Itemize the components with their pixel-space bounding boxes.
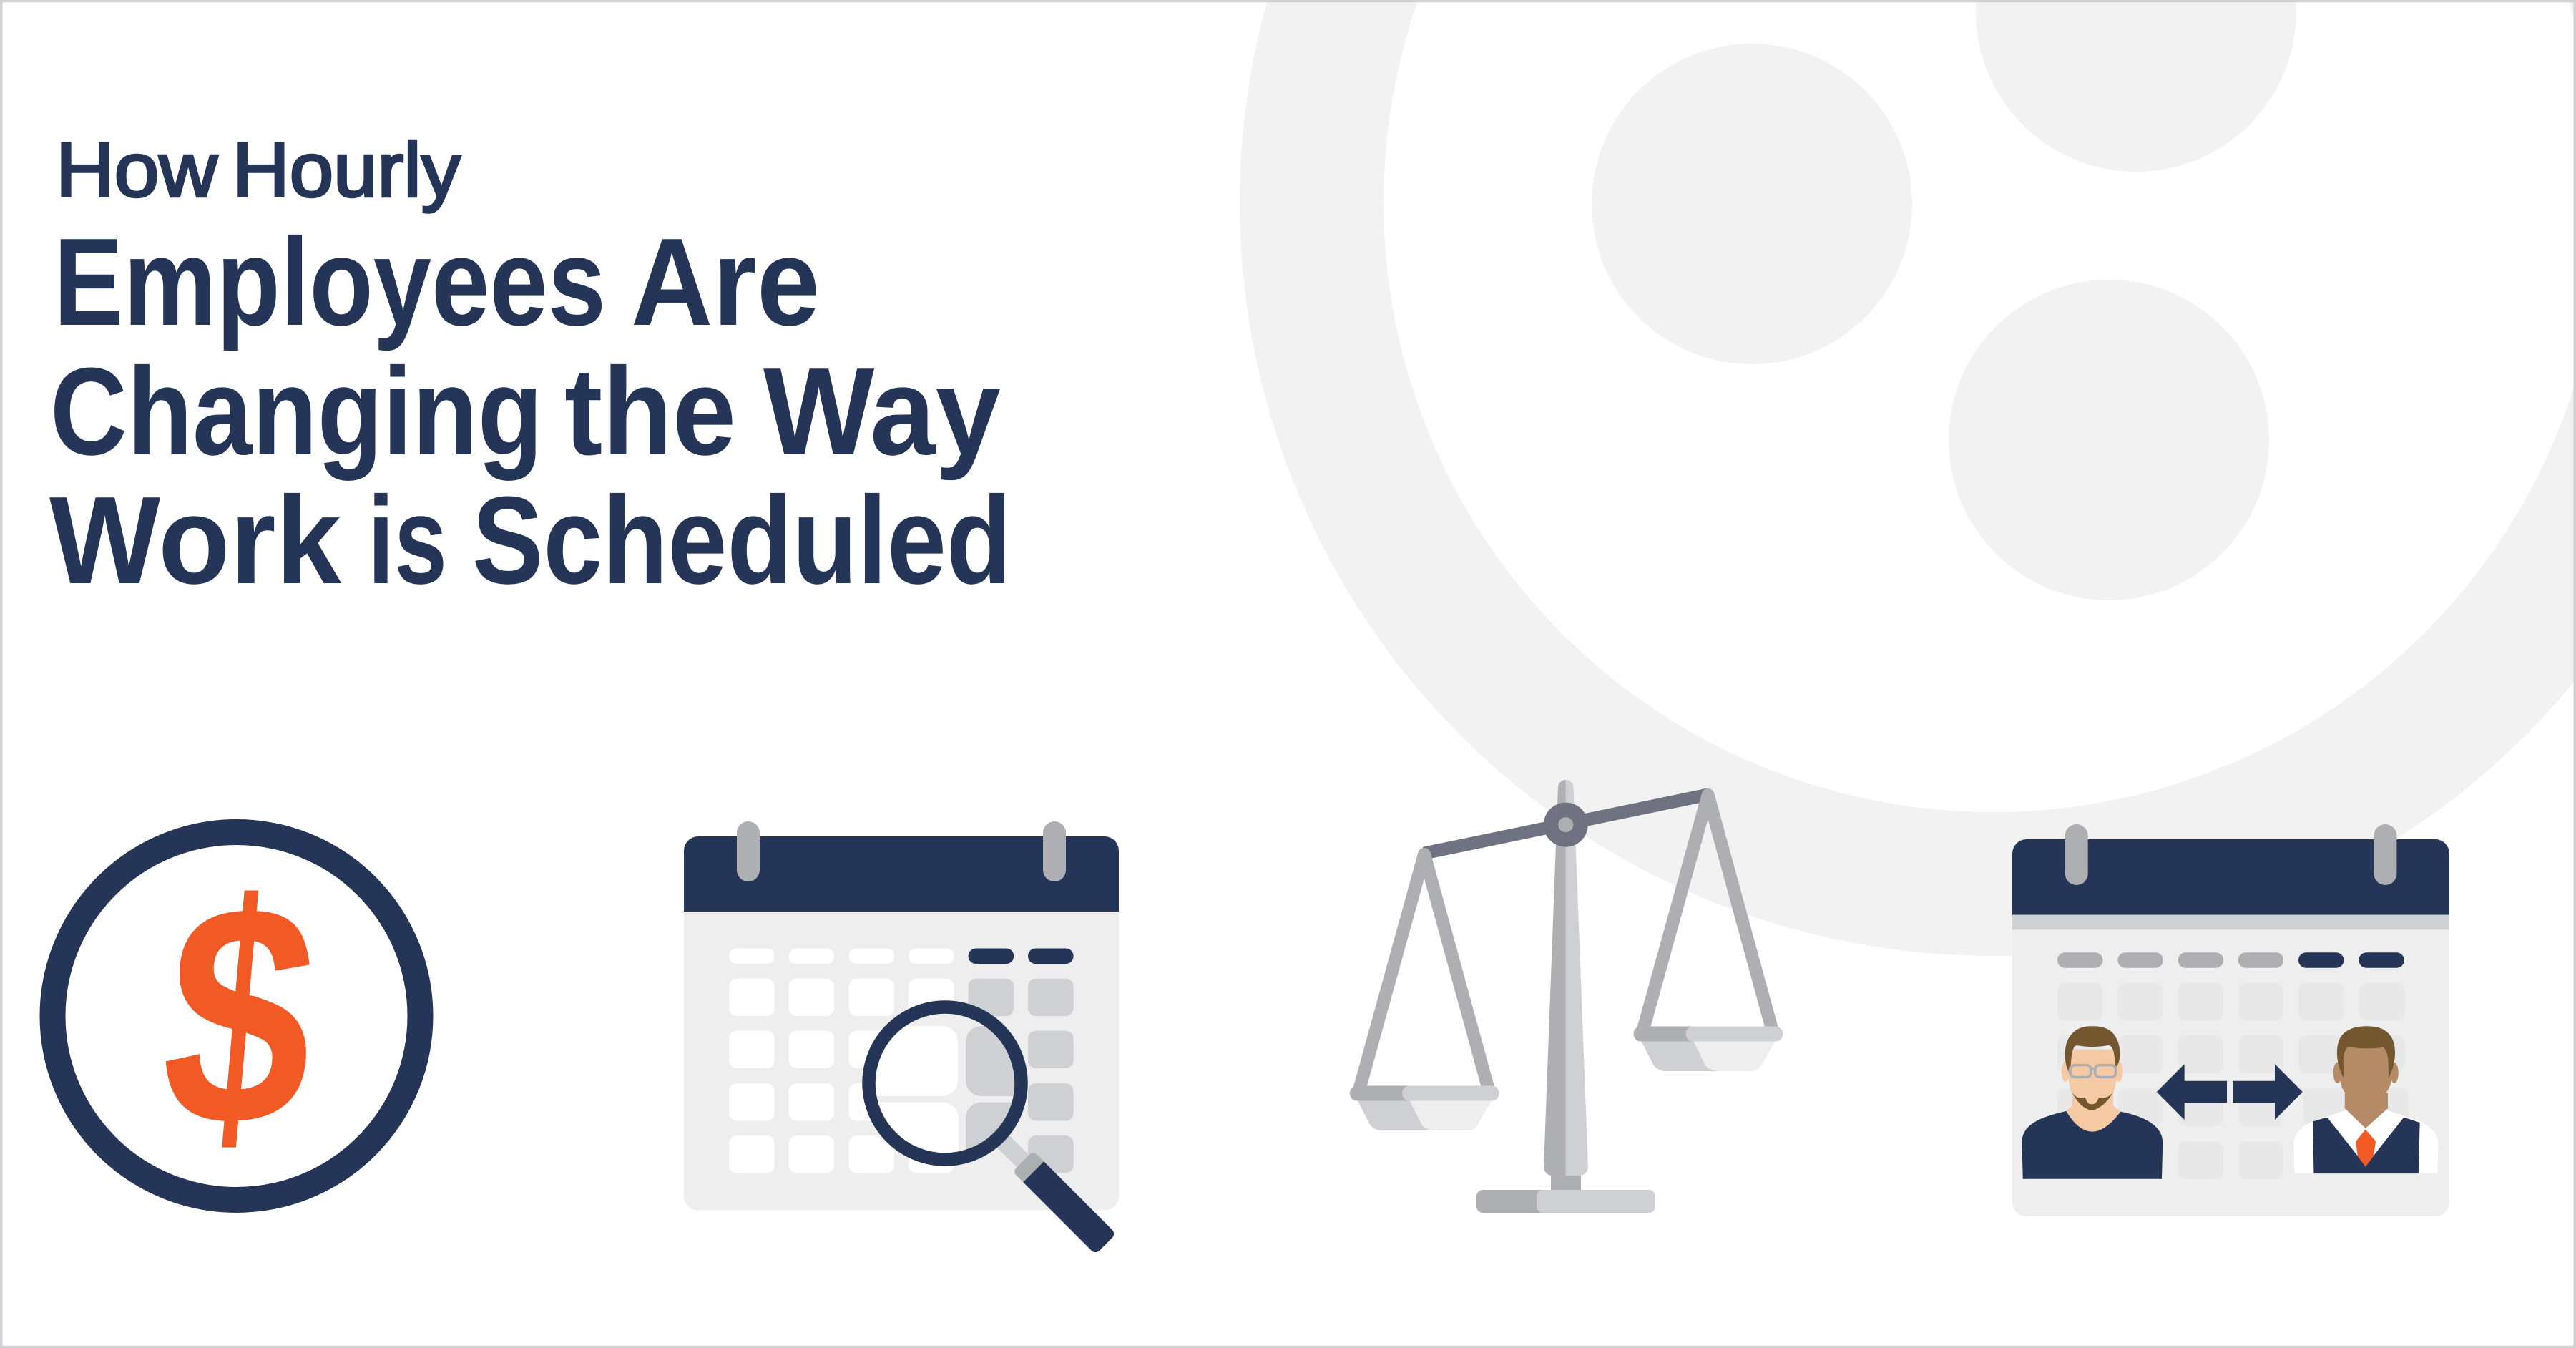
title line: Work is Scheduled: Scheduled bbox=[472, 470, 1012, 610]
right pan bbox=[1634, 795, 1783, 1071]
employee swap figures bbox=[2022, 1026, 2439, 1179]
icon: dollar coin bbox=[53, 832, 421, 1200]
title line: Work is Scheduled: Work bbox=[49, 470, 341, 610]
arrow: left bbox=[2157, 1064, 2227, 1120]
title line: Changing the Way: the bbox=[564, 341, 736, 481]
title line: How Hourly bbox=[56, 126, 461, 213]
magnifying glass bbox=[858, 1007, 1116, 1254]
icon: balance scales bbox=[1350, 780, 1783, 1213]
title line: Work is Scheduled: is bbox=[368, 470, 447, 610]
title line: How Hourly: Hourly bbox=[232, 126, 461, 213]
title line: Changing the Way: Changing bbox=[50, 341, 543, 481]
title line: Employees Are: Employees bbox=[54, 212, 606, 351]
employee in vest and tie bbox=[2293, 1026, 2439, 1173]
title line: How Hourly: How bbox=[56, 126, 218, 213]
icon: calendar with employee shift swap bbox=[2012, 824, 2449, 1216]
left pan bbox=[1350, 854, 1499, 1130]
title line: Employees Are: Are bbox=[631, 212, 820, 351]
title bbox=[49, 126, 1012, 610]
scale beam bbox=[1424, 794, 1708, 854]
dollar sign: $ bbox=[151, 839, 329, 1191]
icon: calendar with magnifying glass bbox=[684, 821, 1119, 1254]
title line: Changing the Way: Way bbox=[763, 341, 1001, 481]
background ring and circles bbox=[1312, 0, 2576, 884]
arrow: right bbox=[2233, 1064, 2303, 1120]
title line: Changing the Way bbox=[50, 341, 1001, 481]
scale hub bbox=[1544, 803, 1588, 847]
title line: Work is Scheduled bbox=[49, 470, 1012, 610]
scale post bbox=[1476, 780, 1655, 1213]
employee with glasses and beard bbox=[2022, 1026, 2163, 1179]
